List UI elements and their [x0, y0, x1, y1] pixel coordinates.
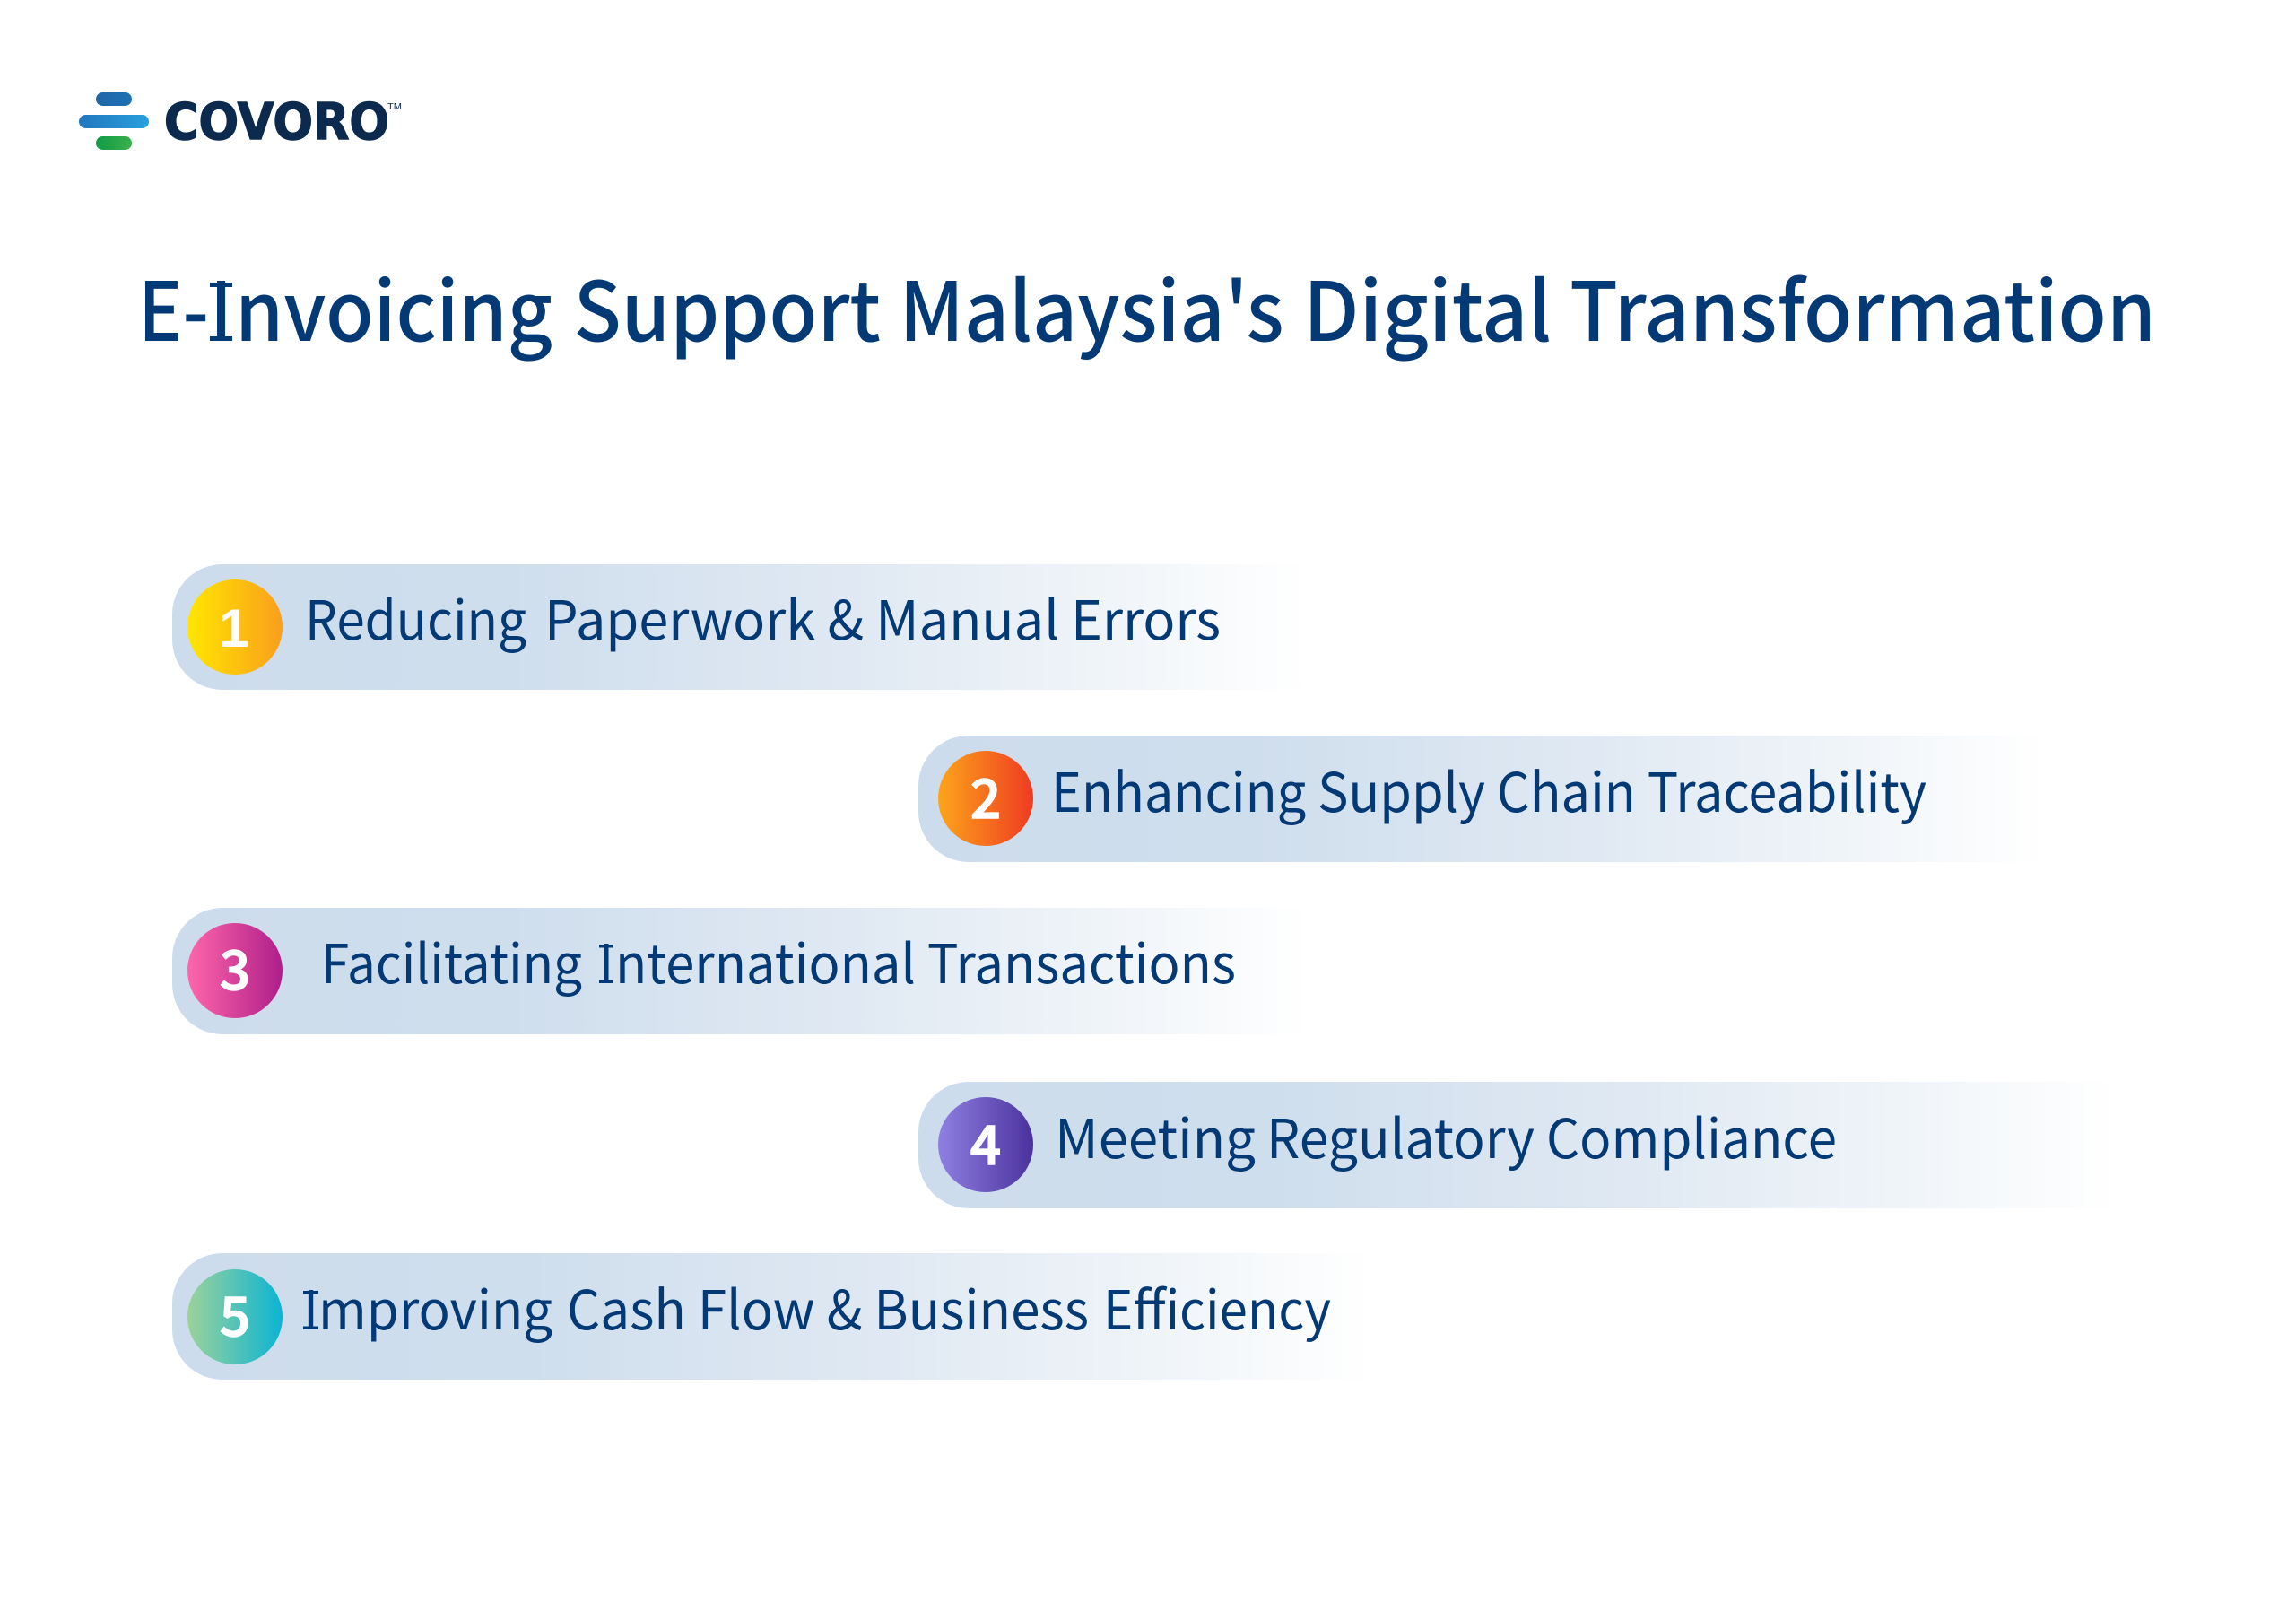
item 4: Meeting Regulatory Compliance — [918, 1082, 2117, 1208]
label 3: Facilitating — [321, 921, 582, 999]
label 2: Enhancing Supply Chain Traceability — [1051, 750, 1926, 828]
item 3: Facilitating International Transactions — [172, 908, 1309, 1034]
item 5: Improving Cash Flow & Business Efficiency — [172, 1253, 1372, 1380]
number badge 1 — [187, 579, 283, 675]
label 1 — [305, 578, 1221, 656]
pill 1 — [172, 564, 1308, 690]
label 1: Paperwork & Manual — [544, 578, 1059, 656]
title: E- — [138, 247, 209, 365]
label 3: nternational Transactions — [615, 921, 1236, 999]
title: Support — [574, 247, 881, 365]
label 4 — [1055, 1096, 1837, 1174]
number badge 5 — [187, 1269, 283, 1364]
label 5: Improving — [303, 1268, 552, 1346]
logo icon: three bars — [79, 92, 149, 150]
title: nvoicing — [235, 247, 552, 365]
label 1: Reducing — [305, 578, 526, 656]
title: Digital — [1303, 247, 1552, 365]
logo: Covoro — [79, 92, 402, 152]
number badge 2: 2 — [970, 756, 1001, 834]
pill 2 — [918, 736, 2045, 862]
title: I — [210, 247, 231, 365]
number badge 2 — [938, 751, 1033, 846]
number badge 3: 3 — [220, 928, 250, 1006]
pill 3 — [172, 908, 1309, 1034]
label 3 — [321, 921, 1236, 999]
label 4: Compliance — [1546, 1096, 1837, 1174]
label 5: Efficiency — [1103, 1268, 1331, 1346]
title: Malaysia's — [899, 247, 1284, 365]
label 3: I — [599, 921, 613, 999]
label 4: Regulatory — [1266, 1096, 1535, 1174]
number badge 4: 4 — [970, 1102, 1001, 1181]
logo wordmark: COVORO — [164, 93, 389, 152]
title — [138, 247, 2156, 365]
label 5 — [303, 1268, 1331, 1346]
number badge 5: 5 — [220, 1274, 250, 1352]
item 1: Reducing Paperwork & Manual Errors — [172, 564, 1308, 690]
label 4: Meeting — [1055, 1096, 1256, 1174]
pill 5 — [172, 1253, 1372, 1380]
label 5: Cash Flow & Business — [567, 1268, 1089, 1346]
label 1: Errors — [1071, 578, 1221, 656]
number badge 1: 1 — [219, 598, 249, 658]
number badge 3 — [187, 923, 283, 1018]
logo trademark: TM — [387, 102, 402, 112]
item 2: Enhancing Supply Chain Traceability — [918, 736, 2045, 862]
pill 4 — [918, 1082, 2117, 1208]
title: Transformation — [1570, 247, 2156, 365]
number badge 4 — [938, 1097, 1033, 1192]
